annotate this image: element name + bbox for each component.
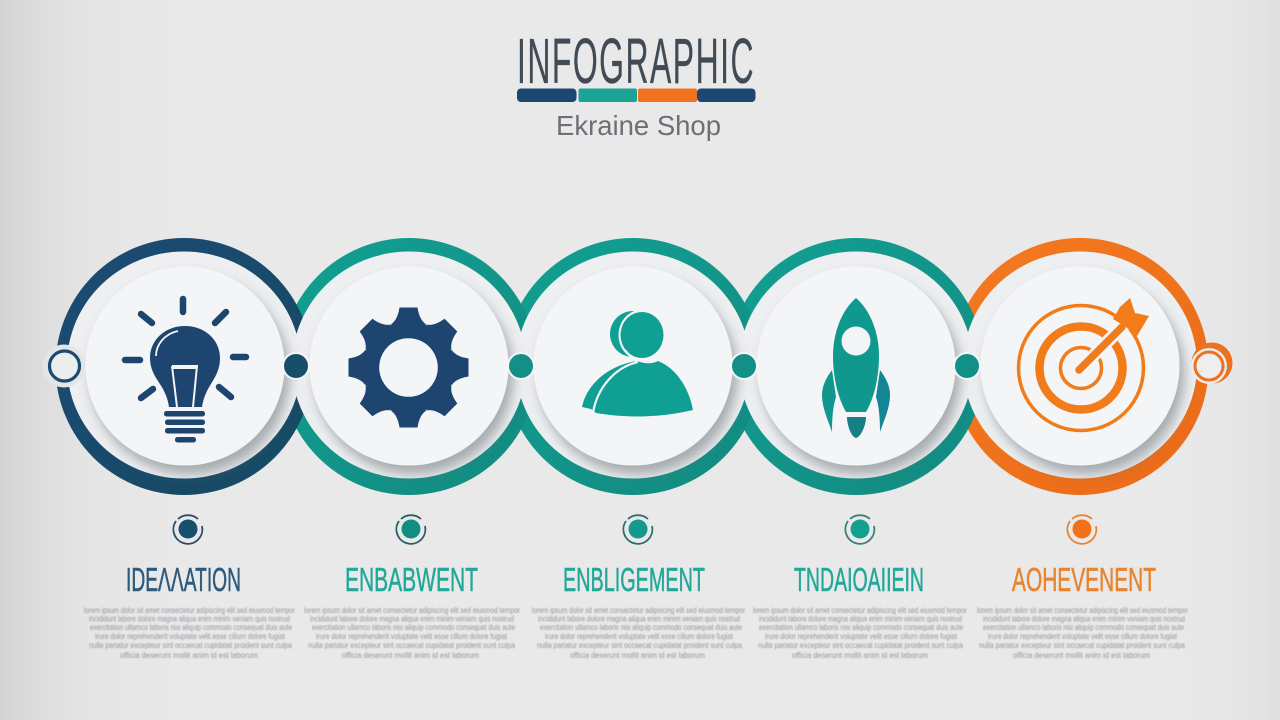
- step 5 body text: officia deserunt mollit anim id est laborum: [1013, 651, 1150, 660]
- light plates: [67, 252, 1197, 478]
- step 2 body text: officia deserunt mollit anim id est laborum: [342, 651, 479, 660]
- step 3 body text: lorem ipsum dolor sit amet consectetur adipiscing elit sed eiusmod tempor: [532, 606, 745, 615]
- icon: rocket: [822, 298, 890, 438]
- step 3 body text: incididunt labore dolore magna aliqua enim minim veniam quis nostrud: [538, 614, 740, 624]
- step 4 heading: TNDAIOAIIEIN: [794, 561, 924, 598]
- step 4 body text: irure dolor reprehenderit voluptate velit esse cillum dolore fugiat: [765, 632, 958, 641]
- step 4 body text: exercitation ullamco laboris nisi aliquip commodo consequat duis aute: [759, 623, 963, 632]
- step 2 body text: lorem ipsum dolor sit amet consectetur adipiscing elit sed eiusmod tempor: [304, 606, 520, 615]
- step 1 body text: nulla pariatur excepteur sint occaecat cupidatat proident sunt culpa: [89, 641, 292, 650]
- icon: gear: [348, 308, 468, 428]
- step 2 body text: nulla pariatur excepteur sint occaecat cupidatat proident sunt culpa: [308, 641, 515, 650]
- step circles chain: [42, 238, 1232, 495]
- ring: orange: [952, 238, 1208, 495]
- connector dots: [282, 352, 981, 380]
- step 1 body text: exercitation ullamco laboris nisi aliquip commodo consequat duis aute: [90, 623, 292, 632]
- step 4 body text: nulla pariatur excepteur sint occaecat cupidatat proident sunt culpa: [758, 641, 963, 650]
- step 4 body text: lorem ipsum dolor sit amet consectetur adipiscing elit sed eiusmod tempor: [753, 606, 967, 615]
- step 2 heading: ENBABWENT: [345, 561, 478, 598]
- marker 4: [845, 515, 874, 544]
- step 5 body text: [977, 606, 1188, 660]
- white discs: [86, 266, 1180, 466]
- step 5 body text: lorem ipsum dolor sit amet consectetur adipiscing elit sed eiusmod tempor: [977, 606, 1188, 615]
- step 5 body text: exercitation ullamco laboris nisi aliquip commodo consequat duis aute: [983, 623, 1184, 632]
- step 5 body text: incididunt labore dolore magna aliqua enim minim veniam quis nostrud: [983, 614, 1185, 624]
- step 5 body text: nulla pariatur excepteur sint occaecat cupidatat proident sunt culpa: [979, 641, 1185, 650]
- step 3 heading: ENBLIGEMENT: [563, 561, 705, 598]
- icon: light bulb: [125, 299, 246, 442]
- step 1 body text: incididunt labore dolore magna aliqua enim minim veniam quis nostrud: [89, 614, 290, 624]
- icon: target with arrow: [1018, 298, 1149, 430]
- start node: [42, 344, 86, 388]
- step 3 body text: exercitation ullamco laboris nisi aliquip commodo consequat duis aute: [540, 623, 742, 632]
- step 3 body text: officia deserunt mollit anim id est laborum: [570, 651, 705, 660]
- step 1 heading: IDEΛΛATION: [126, 561, 241, 598]
- marker 5: [1067, 515, 1096, 544]
- end node: [1191, 342, 1232, 384]
- step 4 body text: [753, 606, 967, 660]
- step markers: [173, 515, 1096, 544]
- step 1 body text: officia deserunt mollit anim id est laborum: [120, 651, 258, 660]
- step 3 body text: irure dolor reprehenderit voluptate velit esse cillum dolore fugiat: [545, 632, 734, 641]
- ring: teal 3: [504, 238, 762, 495]
- step 3 body text: [532, 606, 745, 660]
- step 1 body text: [84, 606, 295, 660]
- subtitle: Ekraine Shop: [556, 110, 721, 141]
- marker 3: [623, 515, 652, 544]
- step 1 body text: lorem ipsum dolor sit amet consectetur adipiscing elit sed eiusmod tempor: [84, 606, 295, 615]
- ring: navy: [56, 238, 312, 495]
- marker 1: [173, 515, 202, 544]
- step 2 body text: exercitation ullamco laboris nisi aliquip commodo consequat duis aute: [312, 623, 515, 632]
- title block: [517, 25, 756, 141]
- ring: teal 4: [728, 238, 984, 495]
- step 5 body text: irure dolor reprehenderit voluptate velit esse cillum dolore fugiat: [988, 632, 1178, 641]
- step 5 heading: AOHEVENENT: [1012, 561, 1156, 598]
- step 4 body text: incididunt labore dolore magna aliqua enim minim veniam quis nostrud: [759, 614, 962, 624]
- marker 2: [396, 515, 425, 544]
- ring: teal 2: [280, 238, 538, 495]
- step 2 body text: [304, 606, 520, 660]
- title colour bar: [517, 88, 756, 102]
- step 1 body text: irure dolor reprehenderit voluptate velit esse cillum dolore fugiat: [95, 632, 286, 641]
- icon: person: [582, 310, 693, 416]
- text: INFOGRAPHIC: [517, 25, 755, 97]
- step 2 body text: incididunt labore dolore magna aliqua enim minim veniam quis nostrud: [310, 614, 514, 624]
- step 3 body text: nulla pariatur excepteur sint occaecat cupidatat proident sunt culpa: [537, 641, 742, 650]
- step 4 body text: officia deserunt mollit anim id est laborum: [792, 651, 928, 660]
- step 2 body text: irure dolor reprehenderit voluptate velit esse cillum dolore fugiat: [316, 632, 508, 641]
